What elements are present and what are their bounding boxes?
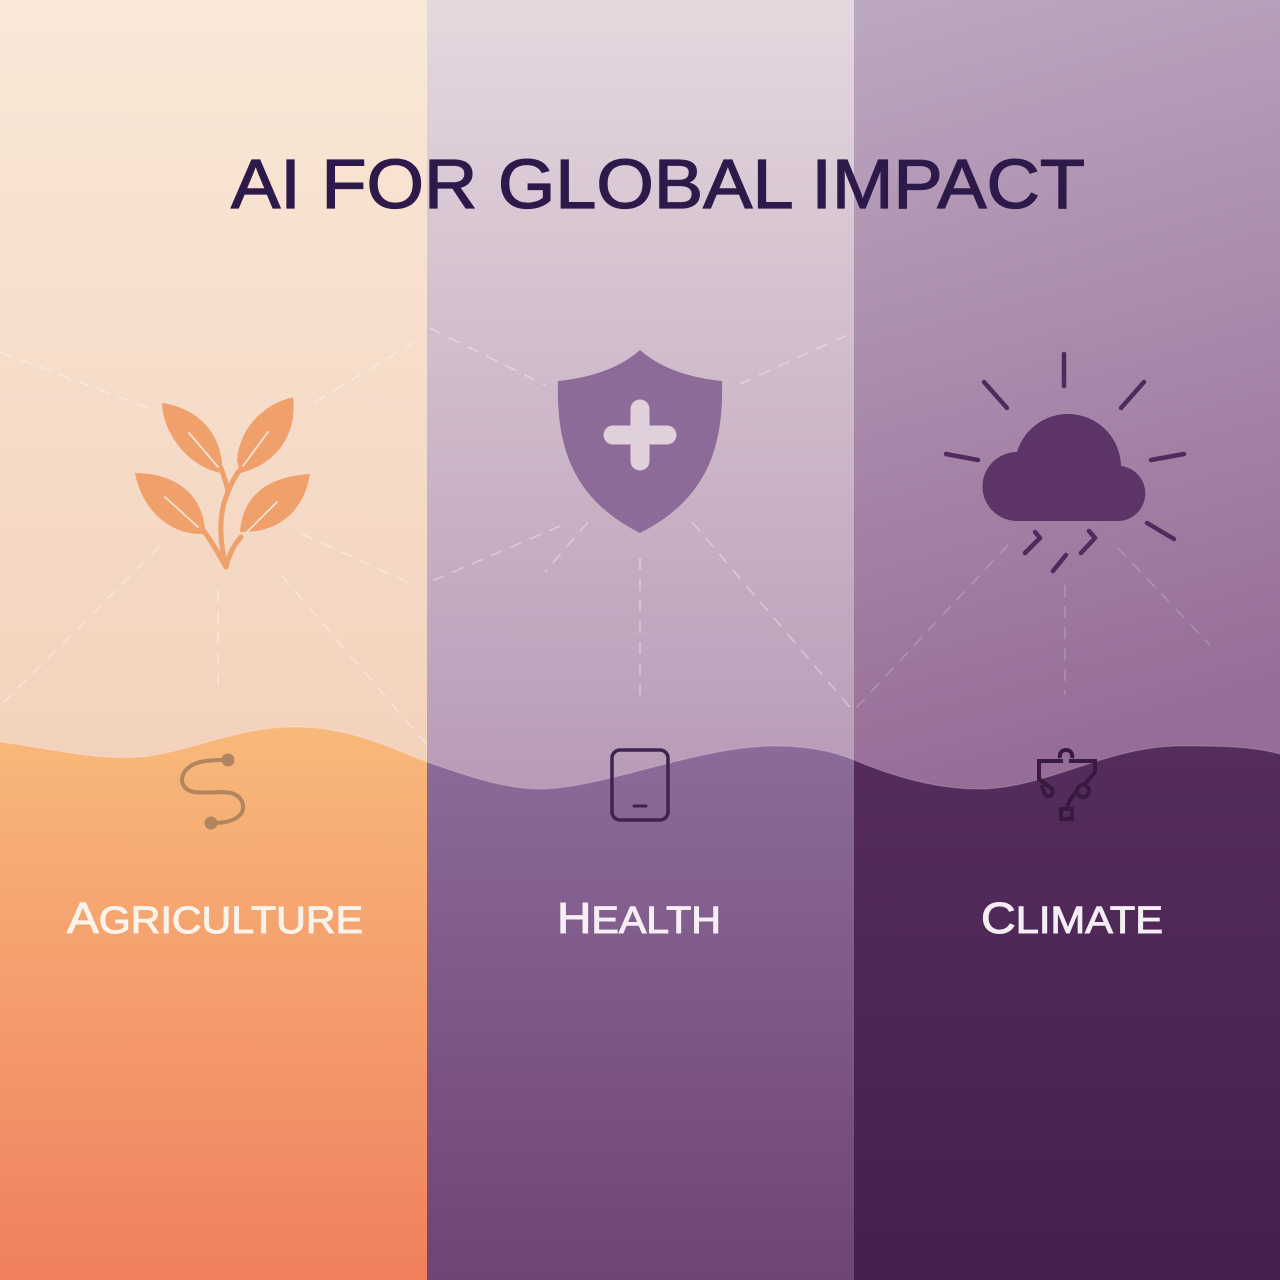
panel: health wave bbox=[427, 746, 854, 1280]
panel: agriculture background bbox=[0, 0, 427, 770]
icon: plant bbox=[135, 397, 310, 567]
panel: climate wave bbox=[854, 746, 1280, 1280]
panel: climate background bbox=[854, 0, 1280, 790]
dashed connector lines bbox=[0, 328, 1210, 745]
icon: sun rays, cloud and rain bbox=[946, 354, 1184, 571]
label: climate: CLIMATE bbox=[981, 894, 1163, 943]
title: AI FOR GLOBAL IMPACT bbox=[231, 145, 1085, 223]
icon: circuit network bbox=[1039, 750, 1095, 819]
icon: shield with cross bbox=[558, 350, 722, 533]
icon: tablet bbox=[612, 750, 668, 820]
icon: agriculture path bbox=[182, 754, 243, 830]
panel: agriculture wave bbox=[0, 727, 427, 1280]
label: health: HEALTH bbox=[557, 894, 721, 943]
panel: health background bbox=[427, 0, 854, 790]
label: agriculture: AGRICULTURE bbox=[67, 894, 363, 943]
wave highlight bbox=[0, 727, 1280, 789]
